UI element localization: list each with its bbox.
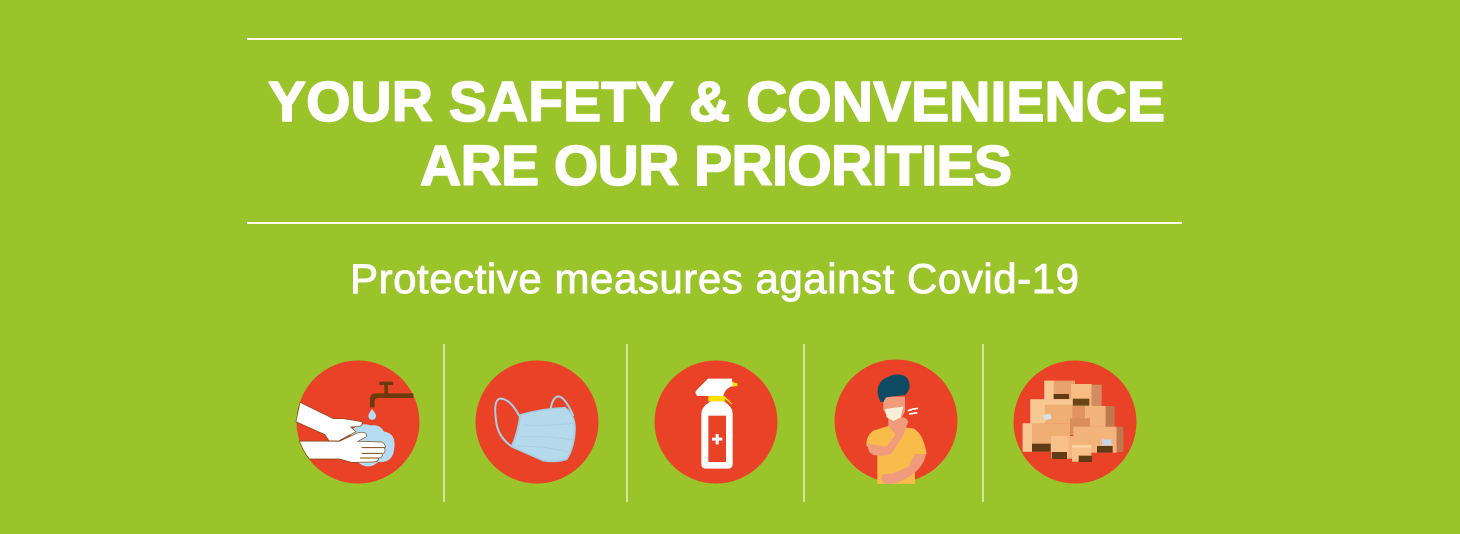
title: ARE OUR PRIORITIES: [420, 134, 1012, 198]
icon: person coughing with mask: [834, 360, 958, 484]
infographic banner: [247, 38, 1182, 502]
subtitle: Protective measures against Covid-19: [350, 255, 1079, 302]
title: [268, 70, 1165, 198]
icon: sanitizer spray bottle: [654, 360, 778, 484]
icon: stacked delivery boxes: [1014, 360, 1136, 484]
icon: hand washing: [296, 360, 420, 484]
icon: face mask: [476, 360, 598, 484]
title: YOUR SAFETY & CONVENIENCE: [268, 70, 1165, 134]
